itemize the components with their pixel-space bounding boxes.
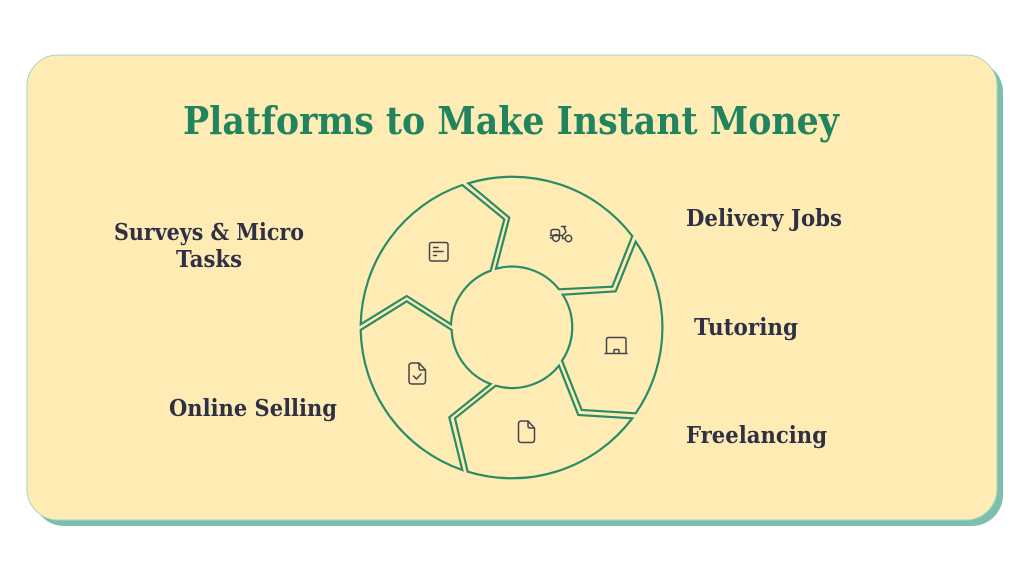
- card shadow: [33, 61, 1003, 526]
- label: surveys and micro tasks: Surveys & Micro: [114, 219, 304, 246]
- label: surveys and micro tasks: [114, 219, 304, 273]
- cycle diagram: [361, 177, 662, 478]
- segment: online selling: [361, 301, 491, 470]
- segment: tutoring: [562, 242, 662, 413]
- icon: document with check: [409, 363, 426, 384]
- label: delivery jobs: Delivery Jobs: [686, 205, 842, 232]
- icon: survey list: [430, 242, 448, 261]
- label: online selling: Online Selling: [169, 395, 337, 422]
- card panel: [27, 55, 997, 520]
- segment: freelancing: [455, 366, 632, 478]
- label: surveys and micro tasks: Tasks: [176, 246, 242, 273]
- title: Platforms to Make Instant Money: [183, 98, 840, 143]
- segment: surveys and micro tasks: [361, 185, 504, 324]
- segment: delivery jobs: [468, 177, 632, 289]
- icon: scooter: [550, 226, 572, 242]
- label: tutoring: Tutoring: [694, 314, 798, 341]
- icon: document: [518, 421, 534, 442]
- icon: blackboard: [605, 338, 627, 354]
- label: freelancing: Freelancing: [686, 422, 827, 449]
